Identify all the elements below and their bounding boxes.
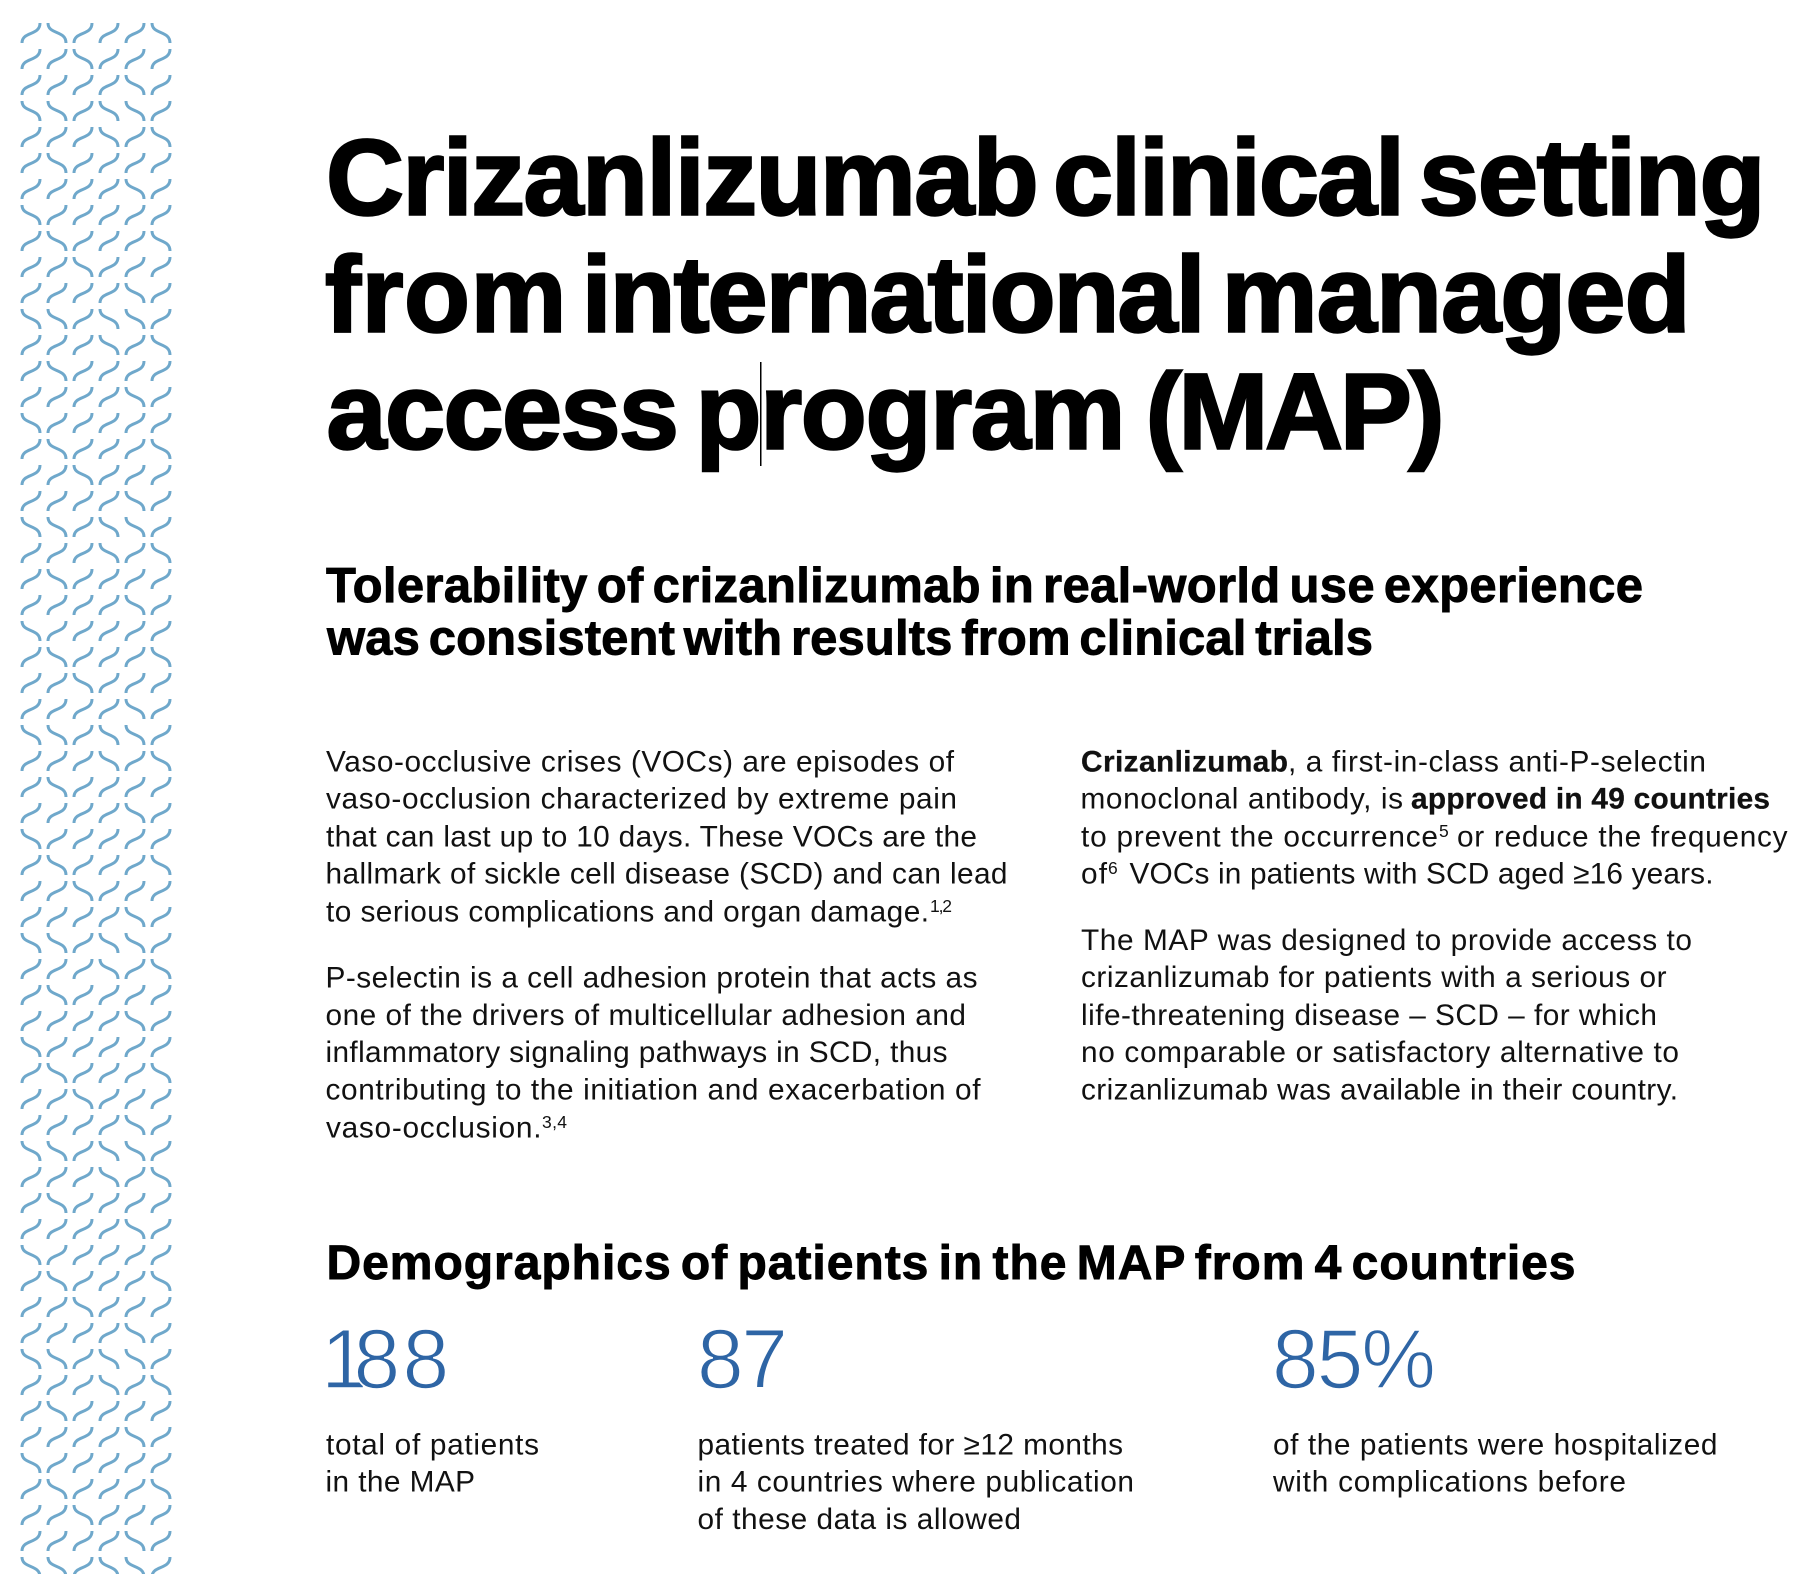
text block: crizanlizumab paragraph [1080, 746, 1788, 890]
title [325, 116, 1766, 472]
text block: VOCs paragraph: vaso-occlusion characterized by extreme pain [326, 782, 957, 816]
text block: VOCs paragraph [326, 746, 1008, 928]
text block: VOCs paragraph: that can last up to 10 days. These VOCs are the [326, 820, 977, 854]
text block: P-selectin paragraph: one of the drivers of multicellular adhesion and [326, 999, 966, 1032]
text block: crizanlizumab paragraph: 6 [1108, 858, 1118, 878]
stat: 87 patients treated [697, 1312, 1134, 1536]
demographics heading: Demographics of patients in the MAP from 4 countries [326, 1237, 1576, 1290]
title: setting [1419, 116, 1766, 238]
text block: crizanlizumab paragraph: or reduce the frequency [1457, 820, 1788, 854]
title: access [326, 350, 679, 472]
text block: P-selectin paragraph: contributing to the initiation and exacerbation of [326, 1074, 981, 1106]
text block: MAP paragraph: crizanlizumab for patients with a serious or [1081, 961, 1667, 994]
stat: 87 patients treated: 87 [697, 1312, 788, 1406]
stat: 87 patients treated: in 4 countries where publication [698, 1466, 1134, 1498]
title: (MAP) [1146, 350, 1445, 472]
text block: crizanlizumab paragraph: VOCs in patients with SCD aged ≥16 years. [1130, 858, 1714, 890]
text block: crizanlizumab paragraph: of [1081, 858, 1108, 890]
text block: P-selectin paragraph: vaso-occlusion. [326, 1112, 542, 1144]
title: from [325, 234, 566, 354]
text block: MAP paragraph: life-threatening disease – SCD – for which [1081, 999, 1657, 1032]
text block: crizanlizumab paragraph: 5 [1439, 821, 1449, 841]
decorative wave pattern strip [18, 20, 174, 1574]
text block: VOCs paragraph: Vaso-occlusive crises (VOCs) are episodes of [326, 746, 955, 778]
text block: crizanlizumab paragraph: , a first-in-class anti-P-selectin [1288, 746, 1706, 778]
text block: P-selectin paragraph: P-selectin is a cell adhesion protein that acts as [326, 962, 978, 994]
stat: 188 total patients: 188 [321, 1312, 449, 1406]
subtitle heading [326, 559, 1643, 666]
title: Crizanlizumab [326, 116, 1039, 238]
text block: crizanlizumab paragraph: Crizanlizumab [1081, 746, 1288, 778]
text block: VOCs paragraph: hallmark of sickle cell disease (SCD) and can lead [326, 858, 1008, 890]
text block: VOCs paragraph: 1,2 [930, 896, 952, 916]
stat: 188 total patients [321, 1312, 539, 1498]
title: international [582, 234, 1206, 354]
title: program [696, 350, 1126, 472]
stat: 87 patients treated: patients treated for ≥12 months [698, 1428, 1123, 1462]
stat: 85% hospitalized: of the patients were hospitalized [1273, 1428, 1718, 1462]
text block: crizanlizumab paragraph: monoclonal antibody, is [1080, 782, 1403, 816]
stat: 188 total patients: total of patients [326, 1428, 539, 1462]
text block: crizanlizumab paragraph: to prevent the occurrence [1081, 820, 1438, 854]
subtitle heading: Tolerability of crizanlizumab in real-world use experience [326, 559, 1643, 613]
stat: 85% hospitalized: with complications before [1272, 1466, 1626, 1498]
title: clinical [1053, 116, 1405, 238]
text block: crizanlizumab paragraph: approved in 49 countries [1411, 782, 1770, 816]
text block: P-selectin paragraph: 3,4 [542, 1112, 567, 1132]
text block: MAP paragraph: crizanlizumab was available in their country. [1081, 1074, 1678, 1106]
text block: VOCs paragraph: to serious complications and organ damage. [326, 896, 929, 928]
text block: P-selectin paragraph [326, 962, 981, 1144]
text block: MAP paragraph [1081, 924, 1692, 1106]
title: managed [1222, 234, 1691, 354]
stat: 87 patients treated: of these data is allowed [698, 1503, 1021, 1536]
stat: 188 total patients: in the MAP [326, 1466, 475, 1498]
text block: MAP paragraph: The MAP was designed to provide access to [1081, 924, 1692, 957]
text block: MAP paragraph: no comparable or satisfactory alternative to [1081, 1036, 1679, 1069]
stat: 85% hospitalized: 85% [1272, 1312, 1436, 1406]
stat: 85% hospitalized [1272, 1312, 1718, 1498]
text block: P-selectin paragraph: inflammatory signaling pathways in SCD, thus [326, 1036, 948, 1069]
subtitle heading: was consistent with results from clinical trials [326, 612, 1373, 666]
